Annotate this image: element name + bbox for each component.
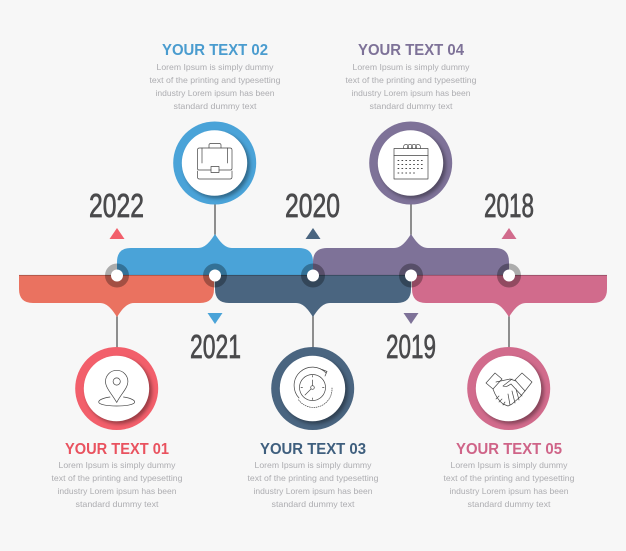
band: 2019 purple top [313, 234, 509, 276]
circle 01: location icon [75, 347, 158, 430]
circle 02: briefcase icon [173, 122, 256, 204]
text block 02: industry Lorem ipsum has been [156, 88, 275, 98]
text block 01: text of the printing and typesetting [52, 473, 183, 483]
text block 01: Lorem Ipsum is simply dummy [58, 460, 176, 470]
text block 02: standard dummy text [174, 101, 257, 111]
year 2020: 2020 [285, 187, 340, 224]
text block 05: text of the printing and typesetting [444, 473, 575, 483]
band: 2021 blue top [117, 234, 313, 276]
text block 01: standard dummy text [76, 499, 159, 509]
band: 2018 pink bottom [412, 275, 607, 317]
text block 01: YOUR TEXT 01 [65, 441, 169, 458]
text block 04: Lorem Ipsum is simply dummy [352, 62, 470, 72]
text block 03 [248, 441, 379, 509]
band: 2022 red bottom [19, 275, 214, 317]
timeline nodes [105, 264, 521, 288]
year 2022: 2022 [89, 187, 144, 224]
text block 02: text of the printing and typesetting [150, 75, 281, 85]
year 2018: 2018 [484, 187, 534, 224]
band: 2020 navy bottom [215, 275, 411, 317]
text block 01 [52, 441, 183, 509]
text block 05: Lorem Ipsum is simply dummy [450, 460, 568, 470]
text block 03: Lorem Ipsum is simply dummy [254, 460, 372, 470]
text block 02: YOUR TEXT 02 [162, 42, 268, 59]
circle 04: calendar icon [369, 122, 452, 204]
year 2021: 2021 [190, 328, 241, 365]
marker triangles [110, 228, 516, 324]
text block 05: YOUR TEXT 05 [456, 441, 562, 458]
text block 04: standard dummy text [370, 101, 453, 111]
year 2019: 2019 [386, 328, 436, 365]
text block 04: industry Lorem ipsum has been [352, 88, 471, 98]
text block 04: text of the printing and typesetting [346, 75, 477, 85]
timeline shadow line [19, 275, 607, 276]
text block 04: YOUR TEXT 04 [358, 42, 464, 59]
text block 03: industry Lorem ipsum has been [254, 486, 373, 496]
connector stems [117, 200, 509, 352]
text block 03: text of the printing and typesetting [248, 473, 379, 483]
text block 04 [346, 42, 477, 111]
text block 05: standard dummy text [468, 499, 551, 509]
circle 05: handshake icon [467, 347, 550, 430]
text block 03: standard dummy text [272, 499, 355, 509]
circle 03: clock icon [271, 347, 354, 430]
text block 01: industry Lorem ipsum has been [58, 486, 177, 496]
text block 03: YOUR TEXT 03 [260, 441, 366, 458]
text block 05 [444, 441, 575, 509]
text block 02: Lorem Ipsum is simply dummy [156, 62, 274, 72]
text block 02 [150, 42, 281, 111]
text block 05: industry Lorem ipsum has been [450, 486, 569, 496]
